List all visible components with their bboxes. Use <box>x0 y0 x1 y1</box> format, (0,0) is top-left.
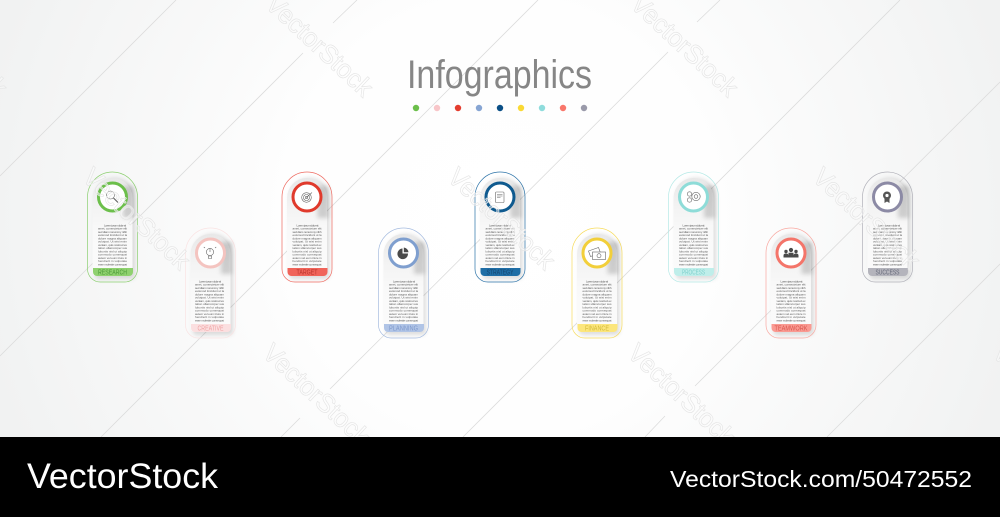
footer bar <box>0 437 1000 517</box>
text block: dolore magna aliquam <box>292 236 322 240</box>
text block: hendrerit in vulputate <box>486 259 515 263</box>
text block: Lorem ipsum dolor sit <box>682 223 705 227</box>
icon ring <box>390 239 418 267</box>
text block: esse molestie consequat <box>389 318 418 322</box>
text block: veniam, quis nostrud ex <box>486 243 515 247</box>
text block: dolore magna aliquam <box>679 236 708 240</box>
text block <box>776 279 806 322</box>
label bar: PROCESS <box>682 270 705 276</box>
text block: Lorem ipsum dolor sit <box>393 279 415 283</box>
text block: veniam, quis nostrud ex <box>776 299 806 303</box>
text block <box>98 223 128 266</box>
text block: veniam, quis nostrud ex <box>582 299 612 303</box>
panel: success <box>862 172 912 282</box>
text block: volutpat. Ut wisi enim <box>873 240 902 244</box>
text block: tation ullamcorper sus <box>98 246 128 250</box>
text block: sed diam nonummy nibh <box>292 230 322 234</box>
panel: research <box>88 172 138 282</box>
text block <box>873 223 902 266</box>
text block: amet, consectetuer elit <box>582 282 612 286</box>
text block: lobortis nisl ut aliquip <box>873 249 902 253</box>
text block: lobortis nisl ut aliquip <box>776 305 806 309</box>
text block: volutpat. Ut wisi enim <box>679 240 708 244</box>
text block: commodo consequat <box>873 252 902 256</box>
text block <box>389 279 418 322</box>
text block: euismod tincidunt ut la <box>98 233 127 237</box>
icon: medal <box>883 192 891 203</box>
label bar: PLANNING <box>389 326 418 332</box>
text block: autem vel eum iriure in <box>195 312 224 316</box>
text block: commodo consequat <box>98 252 127 256</box>
text block: dolore magna aliquam <box>195 292 224 296</box>
watermarks: VectorStock <box>77 161 197 276</box>
icon: pie chart <box>397 248 408 259</box>
text block: euismod tincidunt ut la <box>582 289 612 293</box>
text block: commodo consequat <box>679 252 708 256</box>
label bar: STRATEGY <box>486 270 514 276</box>
label bar: TARGET <box>296 270 318 276</box>
watermarks: VectorStock <box>442 161 562 276</box>
text block: veniam, quis nostrud ex <box>195 299 224 303</box>
text block: autem vel eum iriure in <box>776 312 806 316</box>
text block: autem vel eum iriure in <box>582 312 612 316</box>
text block: lobortis nisl ut aliquip <box>292 249 322 253</box>
text block: hendrerit in vulputate <box>195 315 224 319</box>
icon: team <box>784 248 798 258</box>
text block: amet, consectetuer elit <box>98 226 127 230</box>
text block: volutpat. Ut wisi enim <box>776 296 806 300</box>
icon: gears <box>687 192 700 202</box>
label bar: FINANCE <box>585 326 609 332</box>
panel: planning <box>378 228 428 338</box>
text block: sed diam nonummy nibh <box>873 230 902 234</box>
text block: sed diam nonummy nibh <box>389 286 418 290</box>
text block <box>679 223 708 266</box>
text block: veniam, quis nostrud ex <box>873 243 902 247</box>
icon: light bulb <box>204 247 216 258</box>
text block: dolore magna aliquam <box>486 236 515 240</box>
text block: dolore magna aliquam <box>776 292 806 296</box>
title: Infographics <box>407 53 592 97</box>
text block: tation ullamcorper sus <box>292 246 322 250</box>
text block: euismod tincidunt ut la <box>679 233 708 237</box>
text block: tation ullamcorper sus <box>873 246 902 250</box>
text block: Lorem ipsum dolor sit <box>586 279 608 283</box>
text block: amet, consectetuer elit <box>679 226 708 230</box>
text block: tation ullamcorper sus <box>776 302 806 306</box>
text block: hendrerit in vulputate <box>292 259 322 263</box>
panel: teamwork <box>766 228 816 338</box>
text block: esse molestie consequat <box>582 318 612 322</box>
text block: lobortis nisl ut aliquip <box>679 249 708 253</box>
text block: veniam, quis nostrud ex <box>292 243 322 247</box>
panel: process <box>668 172 718 282</box>
icon ring <box>680 183 708 211</box>
text block: hendrerit in vulputate <box>679 259 708 263</box>
text block: Lorem ipsum dolor sit <box>296 223 319 227</box>
text block: sed diam nonummy nibh <box>486 230 515 234</box>
text block: autem vel eum iriure in <box>98 256 127 260</box>
footer logo: VectorStock <box>27 457 219 496</box>
text block: lobortis nisl ut aliquip <box>486 249 515 253</box>
text block: lobortis nisl ut aliquip <box>195 305 224 309</box>
text block: euismod tincidunt ut la <box>195 289 224 293</box>
text block: euismod tincidunt ut la <box>873 233 902 237</box>
text block: amet, consectetuer elit <box>195 282 224 286</box>
text block: euismod tincidunt ut la <box>389 289 418 293</box>
text block: euismod tincidunt ut la <box>292 233 322 237</box>
icon ring <box>583 239 611 267</box>
text block: sed diam nonummy nibh <box>679 230 708 234</box>
text block: amet, consectetuer elit <box>389 282 418 286</box>
text block <box>486 223 515 266</box>
text block: dolore magna aliquam <box>389 292 418 296</box>
label bar: CREATIVE <box>198 326 224 332</box>
text block: hendrerit in vulputate <box>873 259 902 263</box>
label bar: RESEARCH <box>98 270 127 276</box>
text block: commodo consequat <box>389 308 418 312</box>
text block: hendrerit in vulputate <box>389 315 418 319</box>
text block: amet, consectetuer elit <box>292 226 322 230</box>
text block: amet, consectetuer elit <box>486 226 515 230</box>
text block: esse molestie consequat <box>98 262 127 266</box>
text block: euismod tincidunt ut la <box>776 289 806 293</box>
icon ring <box>874 183 902 211</box>
text block: volutpat. Ut wisi enim <box>98 240 128 244</box>
text block: lobortis nisl ut aliquip <box>98 249 127 253</box>
text block: tation ullamcorper sus <box>389 302 418 306</box>
watermarks: VectorStock <box>257 337 377 452</box>
text block: volutpat. Ut wisi enim <box>389 296 418 300</box>
text block: commodo consequat <box>195 308 224 312</box>
text block: commodo consequat <box>776 308 806 312</box>
text block: sed diam nonummy nibh <box>776 286 806 290</box>
text block: esse molestie consequat <box>292 262 322 266</box>
text block: autem vel eum iriure in <box>389 312 418 316</box>
text block: hendrerit in vulputate <box>582 315 612 319</box>
text block: esse molestie consequat <box>873 262 902 266</box>
text block: commodo consequat <box>486 252 515 256</box>
watermarks: VectorStock <box>622 337 742 452</box>
text block: esse molestie consequat <box>486 262 515 266</box>
text block: tation ullamcorper sus <box>582 302 612 306</box>
watermarks: VectorStock <box>807 161 927 276</box>
colour dots row <box>413 105 587 111</box>
text block: tation ullamcorper sus <box>679 246 708 250</box>
text block: dolore magna aliquam <box>98 236 128 240</box>
text block: tation ullamcorper sus <box>195 302 224 306</box>
text block: veniam, quis nostrud ex <box>389 299 418 303</box>
panel: strategy <box>475 172 525 282</box>
text block: esse molestie consequat <box>679 262 708 266</box>
text block: hendrerit in vulputate <box>98 259 127 263</box>
icon ring <box>486 183 514 211</box>
text block: hendrerit in vulputate <box>776 315 806 319</box>
text block: autem vel eum iriure in <box>873 256 902 260</box>
text block: amet, consectetuer elit <box>873 226 902 230</box>
icon ring <box>98 183 126 211</box>
text block <box>292 223 322 266</box>
label bar: TEAMWORK <box>774 326 808 332</box>
label bar: SUCCESS <box>876 270 900 276</box>
text block: sed diam nonummy nibh <box>582 286 612 290</box>
text block: tation ullamcorper sus <box>486 246 515 250</box>
text block: Lorem ipsum dolor sit <box>489 223 511 227</box>
icon ring <box>293 183 321 211</box>
text block <box>195 279 224 322</box>
text block: euismod tincidunt ut la <box>486 233 515 237</box>
text block: Lorem ipsum dolor sit <box>104 223 126 227</box>
text block: volutpat. Ut wisi enim <box>486 240 515 244</box>
icon: book <box>496 192 504 202</box>
text block: esse molestie consequat <box>776 318 806 322</box>
icon: target <box>302 192 312 202</box>
icon ring <box>777 239 805 267</box>
text block: veniam, quis nostrud ex <box>98 243 128 247</box>
panel: target <box>282 172 332 282</box>
text block: commodo consequat <box>582 308 612 312</box>
text block: amet, consectetuer elit <box>776 282 806 286</box>
panel: creative <box>186 228 236 338</box>
text block: lobortis nisl ut aliquip <box>582 305 612 309</box>
text block <box>582 279 612 322</box>
text block: dolore magna aliquam <box>873 236 902 240</box>
footer image id: VectorStock.com/50472552 <box>670 466 972 492</box>
panel: finance <box>572 228 622 338</box>
icon ring <box>196 239 224 267</box>
text block: autem vel eum iriure in <box>486 256 515 260</box>
text block: sed diam nonummy nibh <box>195 286 224 290</box>
text block: veniam, quis nostrud ex <box>679 243 708 247</box>
text block: sed diam nonummy nibh <box>98 230 127 234</box>
text block: volutpat. Ut wisi enim <box>195 296 224 300</box>
icon: banknotes <box>588 248 606 260</box>
text block: autem vel eum iriure in <box>292 256 322 260</box>
icon: magnifier <box>106 191 118 202</box>
text block: autem vel eum iriure in <box>679 256 708 260</box>
text block: volutpat. Ut wisi enim <box>292 240 322 244</box>
text block: Lorem ipsum dolor sit <box>878 223 900 227</box>
text block: Lorem ipsum dolor sit <box>199 279 221 283</box>
text block: lobortis nisl ut aliquip <box>389 305 418 309</box>
text block: commodo consequat <box>292 252 322 256</box>
text block: volutpat. Ut wisi enim <box>582 296 612 300</box>
text block: dolore magna aliquam <box>582 292 612 296</box>
text block: Lorem ipsum dolor sit <box>780 279 803 283</box>
text block: esse molestie consequat <box>195 318 224 322</box>
